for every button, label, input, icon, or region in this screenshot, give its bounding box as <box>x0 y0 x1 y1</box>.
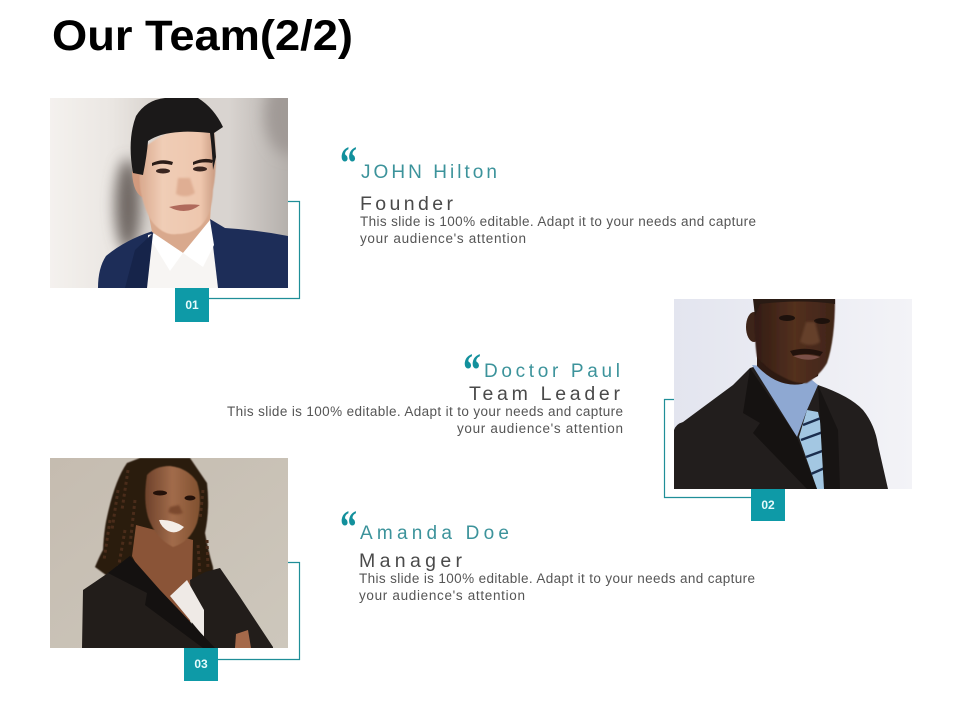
number badge 03: 03 <box>194 657 208 671</box>
role: Founder: Founder <box>360 193 454 215</box>
role: Manager: Manager <box>359 550 462 572</box>
role: Team Leader: Team Leader <box>469 383 620 405</box>
description: This slide is 100% editable. Adapt it to your needs and capture <box>360 214 756 229</box>
panel: Doctor Paul <box>227 299 912 521</box>
name: John Hilton: JOHN Hilton <box>361 162 497 183</box>
photo: Doctor Paul portrait <box>674 299 912 489</box>
connector line 03 <box>218 562 300 660</box>
description: This slide is 100% editable. Adapt it to your needs and capture <box>227 404 623 419</box>
photo: John Hilton portrait <box>50 98 288 288</box>
photo: Amanda Doe portrait <box>50 458 288 648</box>
quote mark: “ <box>340 501 357 554</box>
description: your audience's attention <box>457 421 623 436</box>
description: your audience's attention <box>359 588 525 603</box>
connector line 02 <box>664 400 751 498</box>
description: This slide is 100% editable. Adapt it to your needs and capture <box>359 571 755 586</box>
number badge 03 <box>184 648 218 681</box>
quote mark: “ <box>340 137 357 190</box>
number badge 02: 02 <box>761 498 775 512</box>
connector line 01 <box>209 202 300 298</box>
description <box>227 404 623 436</box>
panel: John Hilton <box>50 75 756 322</box>
description: your audience's attention <box>360 231 526 246</box>
name: Doctor Paul: Doctor Paul <box>484 361 620 382</box>
description <box>360 214 756 246</box>
name: Amanda Doe: Amanda Doe <box>360 523 509 544</box>
number badge 02 <box>751 489 785 521</box>
panel: Amanda Doe <box>50 458 755 681</box>
number badge 01 <box>175 288 209 322</box>
description <box>359 571 755 603</box>
title: Our Team(2/2) <box>52 12 353 60</box>
quote mark: “ <box>463 344 481 397</box>
number badge 01: 01 <box>185 298 199 312</box>
